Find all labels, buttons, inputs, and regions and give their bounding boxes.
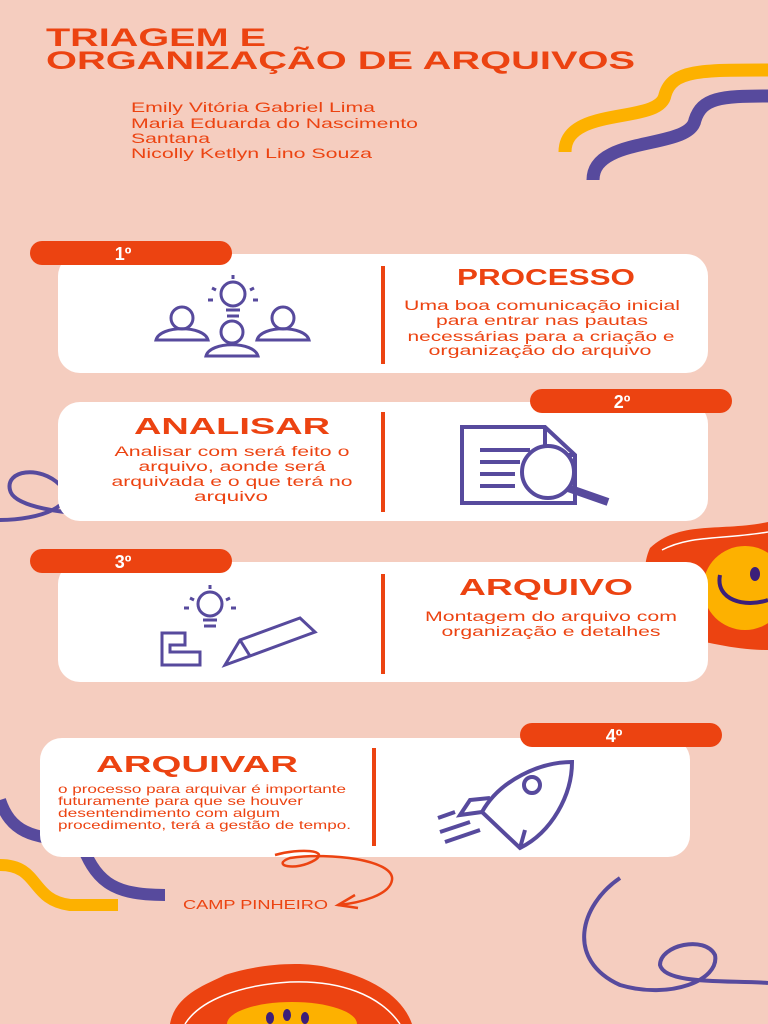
text: analisar [112,444,352,504]
badge 2: 2º [614,392,631,412]
text: camp pinheiro: CAMP PINHEIRO [183,898,328,912]
text: processo: organização do arquivo [428,343,652,358]
text: processo: para entrar nas pautas [436,313,648,328]
divider [381,574,385,674]
heading: analisar: ANALISAR [134,413,331,439]
text: analisar: Analisar com será feito o [114,444,350,459]
panel: step 2 analisar [58,389,732,521]
badge 2 [530,389,732,413]
panel: step 3 arquivo [30,549,708,682]
authors: Nicolly Ketlyn Lino Souza [131,145,372,161]
text: analisar: arquivo [194,489,268,504]
panel: step 4 arquivar [40,723,722,857]
text: arquivo: organização e detalhes [442,624,661,639]
divider [381,266,385,364]
icon: rocket [438,762,572,848]
divider [381,412,385,512]
badge 3: 3º [115,552,132,572]
arrow: swirl to camp pinheiro [275,851,392,908]
text: processo: Uma boa comunicação inicial [404,298,680,313]
title: TRIAGEM E [46,24,266,52]
authors: Emily Vitória Gabriel Lima [131,99,375,115]
badge 1 [30,241,232,265]
text: arquivar: procedimento, terá a gestão de tempo. [58,818,351,832]
icon: idea pencil [162,585,315,665]
heading: arquivar: ARQUIVAR [96,751,299,777]
panel: step 1 processo [30,241,708,373]
authors: Maria Eduarda do Nascimento [131,115,418,131]
badge 4 [520,723,722,747]
text: arquivar: desentendimento com algum [58,806,280,820]
decoration: left loop [0,472,218,520]
decoration: bottom-right loop [584,878,768,990]
text: analisar: arquivada e o que terá no [112,474,352,489]
authors [131,99,418,161]
title: ORGANIZAÇÃO DE ARQUIVOS [46,45,635,75]
icon: team idea [156,275,309,356]
decoration: bottom flower [170,964,412,1024]
text: arquivar: futuramente para que se houver [58,794,303,808]
divider [372,748,376,846]
decoration: bottom-left waves [0,800,165,905]
text: arquivo [425,609,677,639]
text: processo [404,298,680,358]
text: processo: necessárias para a criação e [408,329,674,344]
icon: document magnifier [462,427,608,503]
text: arquivar: o processo para arquivar é importante [58,782,346,796]
badge 3 [30,549,232,573]
text: arquivar [58,782,351,832]
text: analisar: arquivo, aonde será [138,459,326,474]
badge 1: 1º [115,244,132,264]
heading: processo: PROCESSO [457,264,635,290]
title [46,24,635,75]
heading: arquivo: ARQUIVO [459,574,633,600]
authors: Santana [131,130,210,146]
decoration: right smiley flower [645,522,768,650]
badge 4: 4º [606,726,623,746]
text: arquivo: Montagem do arquivo com [425,609,677,624]
decoration: top right waves [565,70,768,180]
